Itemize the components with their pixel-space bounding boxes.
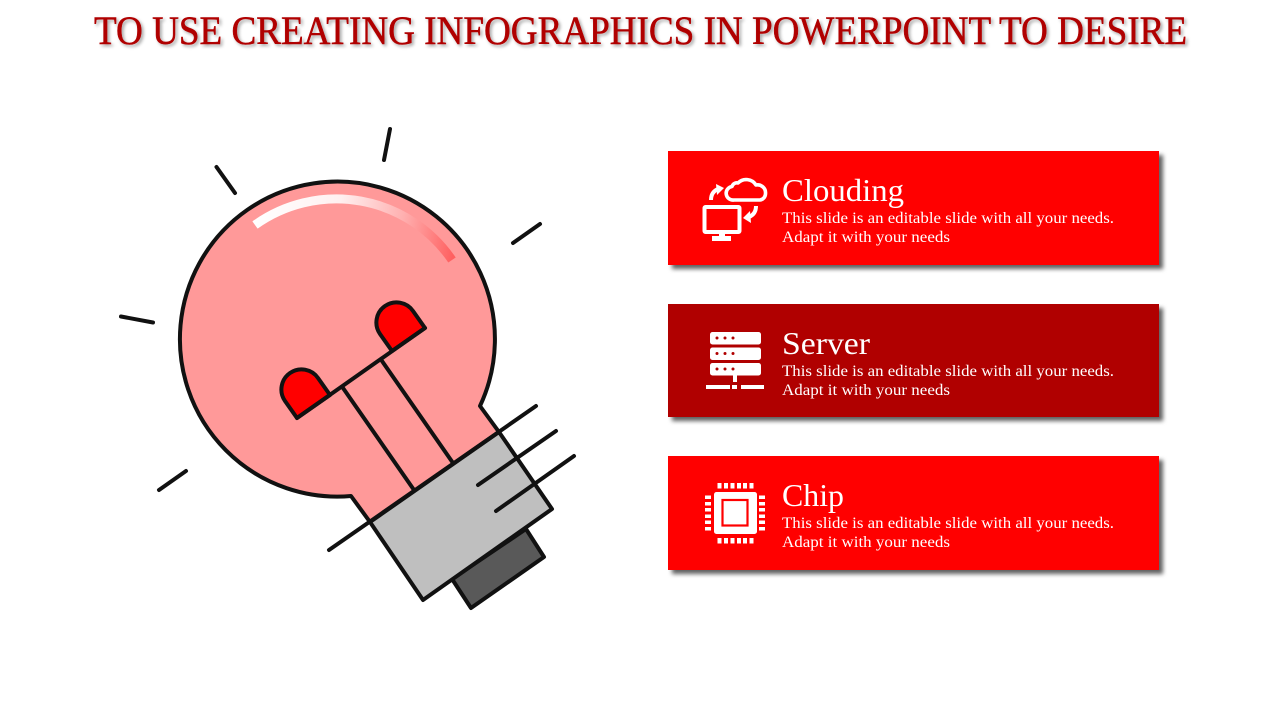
description: This slide is an editable slide with all your needs. [782, 515, 1114, 532]
description: Adapt it with your needs [782, 534, 950, 551]
panel background [668, 304, 1159, 417]
heading: Server [782, 325, 870, 361]
panel: clouding [668, 151, 1159, 265]
bulb screw base [370, 432, 552, 600]
title: TO USE CREATING INFOGRAPHICS IN POWERPOINT TO DESIRE [94, 8, 1187, 53]
panel: chip [668, 456, 1159, 570]
highlight on glass [255, 199, 452, 260]
panel background [668, 151, 1159, 265]
panel background [668, 456, 1159, 570]
filament right cap [376, 302, 425, 351]
description: Adapt it with your needs [782, 229, 950, 246]
icon: server rack [706, 332, 764, 389]
screw thread lines [329, 406, 574, 550]
icon: microchip [705, 483, 765, 544]
filament left cap [281, 369, 330, 418]
description: This slide is an editable slide with all your needs. [782, 363, 1114, 380]
bulb tip [452, 529, 544, 608]
description: This slide is an editable slide with all your needs. [782, 210, 1114, 227]
panel: server [668, 304, 1159, 417]
heading: Chip [782, 477, 844, 513]
filament wires [297, 328, 453, 490]
icon: cloud and monitor sync [704, 180, 766, 241]
light rays [121, 129, 540, 490]
light bulb illustration [121, 129, 574, 608]
bulb glass [180, 182, 499, 522]
description: Adapt it with your needs [782, 382, 950, 399]
heading: Clouding [782, 172, 904, 208]
